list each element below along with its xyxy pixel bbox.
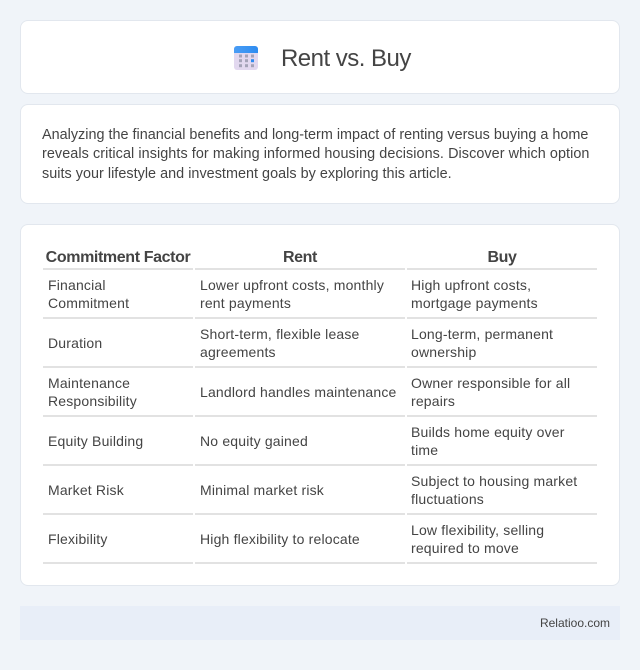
comparison table: Rent (283, 249, 317, 266)
intro text: suits your lifestyle and investment goals by exploring this article. (42, 166, 452, 182)
intro text: Analyzing the financial benefits and long-term impact of renting versus buying a home (42, 126, 588, 142)
comparison table: mortgage payments (411, 295, 538, 311)
panel: intro card (20, 104, 620, 204)
comparison table: Builds home equity over (411, 424, 565, 440)
comparison table: agreements (200, 344, 276, 360)
row: flexibility (48, 522, 544, 556)
comparison table: Owner responsible for all (411, 375, 570, 391)
comparison table: Flexibility (48, 531, 108, 547)
comparison table: fluctuations (411, 491, 484, 507)
icon: calendar (234, 46, 258, 70)
footer bar (20, 606, 620, 640)
table header (46, 249, 517, 266)
comparison table: High upfront costs, (411, 277, 531, 293)
comparison table: Long-term, permanent (411, 326, 553, 342)
row: market risk (48, 473, 578, 507)
comparison table: Buy (487, 249, 517, 266)
footer credit: Relatioo.com (540, 616, 610, 630)
intro text: reveals critical insights for making informed housing decisions. Discover which option (42, 146, 590, 162)
comparison table: required to move (411, 540, 519, 556)
comparison table: Minimal market risk (200, 482, 324, 498)
row: duration (48, 326, 553, 360)
comparison table: Landlord handles maintenance (200, 384, 397, 400)
comparison table: Responsibility (48, 393, 137, 409)
comparison table: Lower upfront costs, monthly (200, 277, 384, 293)
comparison table: Equity Building (48, 433, 143, 449)
comparison table: No equity gained (200, 433, 308, 449)
comparison table: Commitment Factor (46, 249, 190, 266)
row: maintenance responsibility (48, 375, 570, 409)
row: financial commitment (48, 277, 538, 311)
intro text (42, 126, 590, 182)
panel: title card (20, 20, 620, 94)
comparison table: repairs (411, 393, 455, 409)
comparison table: time (411, 442, 438, 458)
comparison table: Subject to housing market (411, 473, 577, 489)
comparison table: Commitment (48, 295, 129, 311)
comparison table: Short-term, flexible lease (200, 326, 360, 342)
comparison table: Financial (48, 277, 106, 293)
comparison table: ownership (411, 344, 476, 360)
comparison table: rent payments (200, 295, 291, 311)
panel: comparison table card (20, 224, 620, 586)
comparison table: Low flexibility, selling (411, 522, 544, 538)
comparison table: Market Risk (48, 482, 124, 498)
comparison table: Duration (48, 335, 102, 351)
row: equity building (48, 424, 565, 458)
comparison table: Maintenance (48, 375, 130, 391)
comparison table: High flexibility to relocate (200, 531, 360, 547)
title: Rent vs. Buy (281, 45, 411, 72)
